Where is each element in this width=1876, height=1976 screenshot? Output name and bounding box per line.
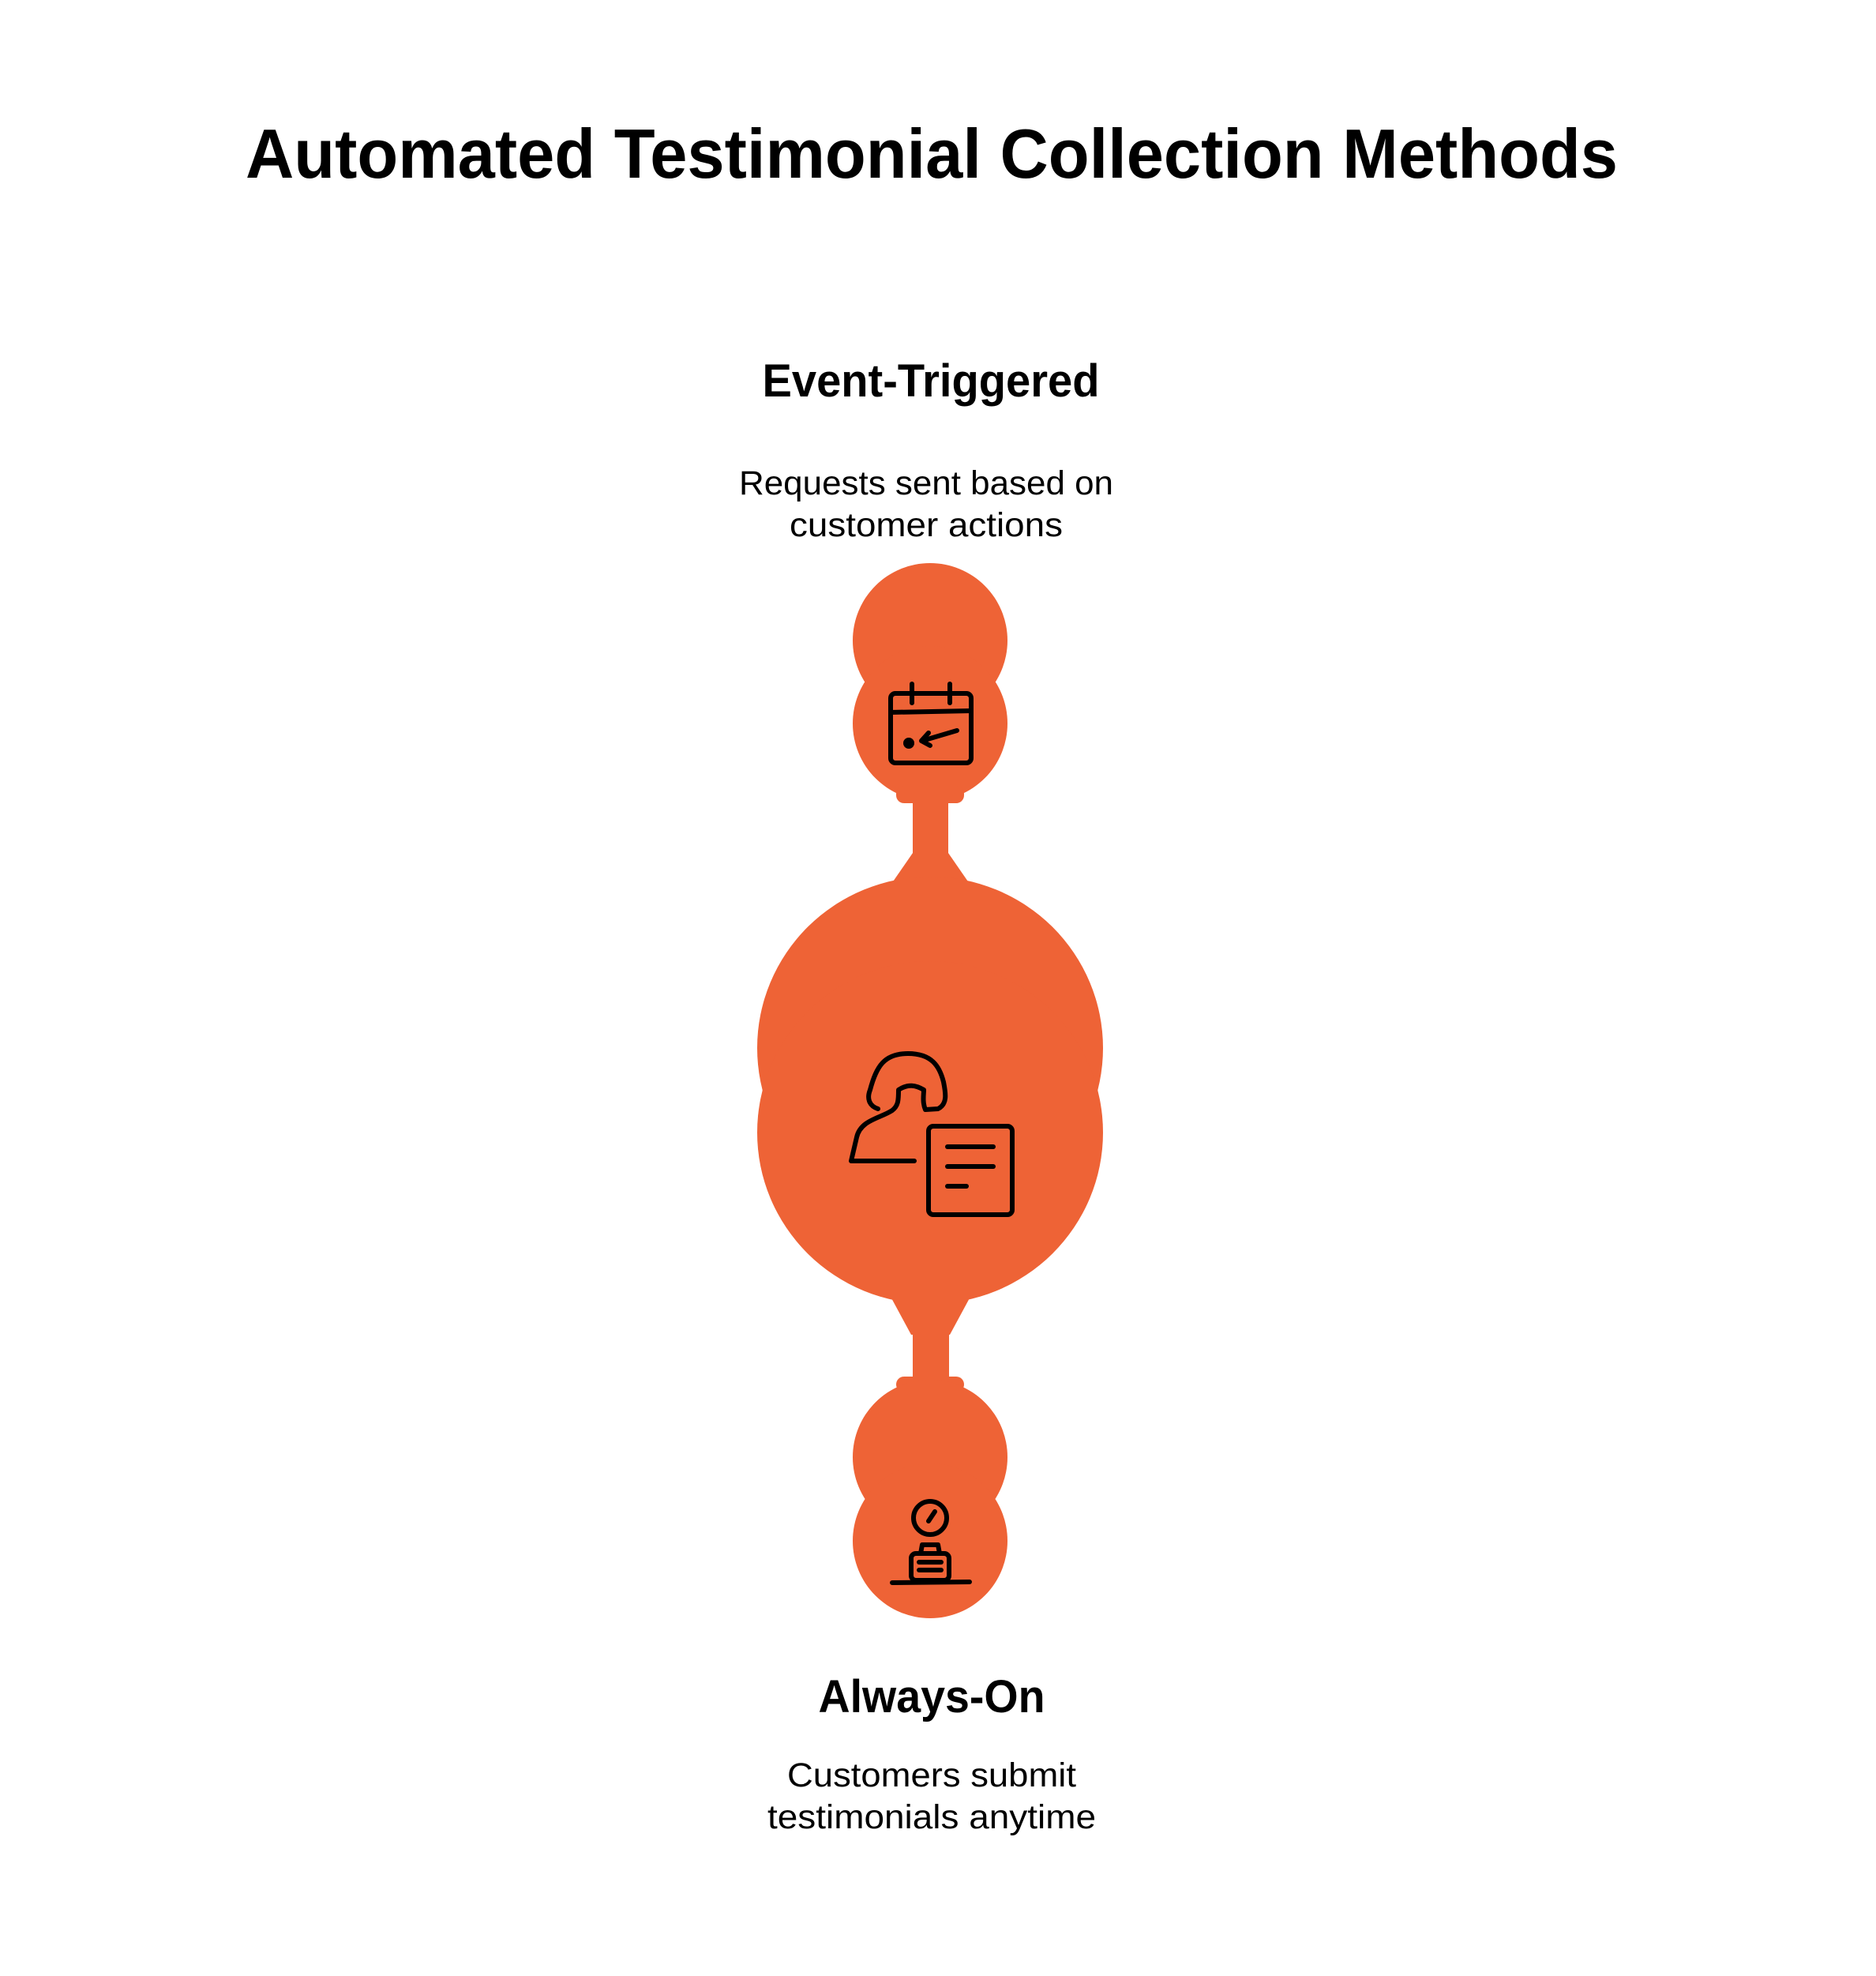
icon: clock with box xyxy=(892,1501,970,1583)
icon: calendar xyxy=(891,684,971,763)
icon: person with document xyxy=(851,1054,1012,1215)
title: Automated Testimonial Collection Methods xyxy=(246,115,1618,193)
text: event-triggered description xyxy=(739,464,1113,544)
text: always-on description: Customers submit xyxy=(787,1756,1076,1794)
diagram: orange shape chain xyxy=(757,563,1103,1618)
text: event-triggered description: customer actions xyxy=(790,506,1063,544)
text: always-on description xyxy=(767,1756,1096,1836)
text: always-on description: testimonials anytime xyxy=(767,1798,1096,1836)
heading: Event-Triggered: Event-Triggered xyxy=(763,355,1099,407)
heading: Always-On: Always-On xyxy=(818,1671,1045,1722)
text: event-triggered description: Requests sent based on xyxy=(739,464,1113,502)
